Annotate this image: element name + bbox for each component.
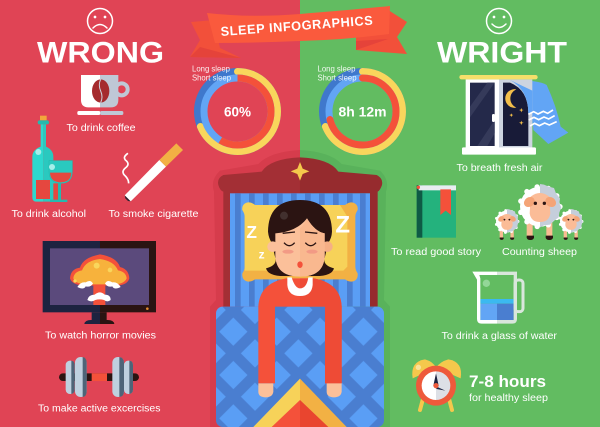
donut chart: sleep time [318, 64, 402, 152]
callout: healthy sleep hours: for healthy sleep [469, 393, 548, 404]
headboard [218, 157, 382, 307]
donut value: 60% [224, 104, 251, 120]
television with explosion icon [43, 241, 156, 324]
title ribbon [190, 6, 407, 58]
water jug icon [472, 272, 523, 324]
label: exercises: To make active excercises [38, 404, 160, 414]
sad face icon [88, 8, 112, 34]
donut value: 8h 12m [338, 104, 386, 120]
wine and bottle icon [32, 116, 72, 202]
label: horror movies: To watch horror movies [45, 330, 156, 342]
background: red left panel [0, 0, 300, 427]
snore letters [246, 211, 350, 261]
snore letters: z [259, 247, 265, 261]
donut legend labels: Short sleep [318, 74, 357, 82]
striped bed back [230, 193, 370, 307]
callout: healthy sleep hours: 7-8 hours [469, 373, 546, 391]
background: green right panel [300, 0, 600, 427]
bed halo [210, 150, 390, 427]
dumbbell icon [59, 357, 139, 397]
callout: healthy sleep hours [469, 373, 548, 404]
label: cigarette: To smoke cigarette [108, 209, 199, 220]
donut legend labels [192, 64, 232, 82]
title text: SLEEP INFOGRAPHICS [220, 13, 374, 39]
alarm clock icon [412, 359, 461, 410]
woman [258, 200, 342, 397]
donut chart: sleep percent [192, 64, 278, 152]
donut legend labels: Long sleep [192, 64, 231, 74]
three sheep icon [496, 184, 583, 240]
snore letters: Z [246, 222, 257, 242]
donut legend labels: Short sleep [192, 74, 232, 82]
window at night icon [459, 75, 568, 155]
label: counting sheep: Counting sheep [502, 247, 577, 258]
heading: wrong: WRONG [37, 36, 164, 70]
heading: wright: WRIGHT [437, 36, 567, 70]
snore letters: Z [335, 211, 350, 238]
label: fresh air: To breath fresh air [456, 163, 543, 174]
book icon [417, 185, 456, 238]
smiling face icon [486, 8, 512, 34]
donut legend labels: Long sleep [318, 64, 356, 74]
cigarette icon [123, 143, 183, 201]
blanket triangle [253, 379, 347, 427]
label: coffee: To drink coffee [66, 123, 136, 134]
label: water: To drink a glass of water [442, 331, 558, 342]
label: read story: To read good story [391, 247, 481, 258]
bed with sleeping woman [210, 150, 390, 427]
coffee cup icon [77, 75, 128, 115]
donut legend labels [318, 64, 357, 82]
label: alcohol: To drink alcohol [12, 209, 86, 220]
pillow [242, 202, 358, 282]
duvet [216, 307, 384, 427]
